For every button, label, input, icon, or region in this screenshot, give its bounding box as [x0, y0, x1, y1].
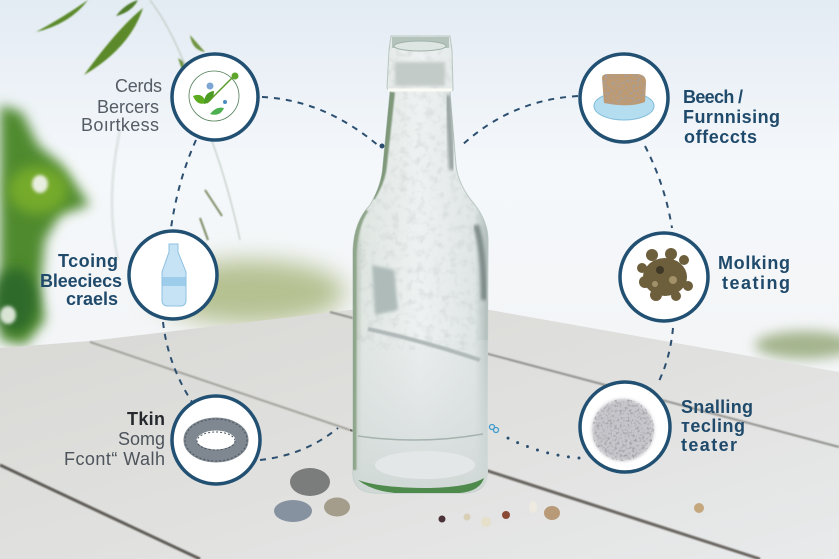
label: pellets	[718, 253, 790, 293]
label: pellets: Molking	[718, 253, 790, 273]
icon: block on dish	[594, 72, 654, 120]
node: ring	[172, 396, 260, 484]
label: herbs: Bercers	[97, 97, 159, 117]
glass bottle	[350, 30, 492, 493]
label: bottle: craels	[66, 289, 118, 309]
dashed connectors	[163, 96, 673, 460]
label: pellets: teating	[722, 273, 790, 293]
wooden table	[0, 310, 839, 559]
label: ring: Somg	[118, 429, 165, 449]
node: pellets	[620, 233, 708, 321]
label: beech: Furnnising	[683, 107, 780, 127]
label: powder: Snalling	[681, 397, 753, 417]
label: bottle	[40, 251, 122, 309]
label: ring	[64, 409, 165, 469]
label: herbs: Cerds	[115, 76, 162, 96]
pebbles and seeds	[274, 468, 704, 527]
label: herbs: Boırtkess	[81, 115, 159, 135]
label: powder	[681, 397, 753, 455]
label: herbs	[81, 76, 162, 135]
icon: leaves	[189, 71, 239, 121]
label: beech: Beech /	[683, 87, 743, 107]
label: bottle: Tcoing	[58, 251, 118, 271]
node: powder	[580, 382, 670, 472]
branch leaves	[36, 0, 240, 260]
label: ring: Tkin	[127, 409, 165, 429]
blurred foliage backdrop	[0, 105, 839, 359]
icon: powder heap	[590, 398, 656, 462]
label: beech: offeccts	[684, 127, 757, 147]
icon: pellet pile	[637, 248, 693, 301]
label: bottle: Bleeciecs	[40, 271, 122, 291]
icon: textured ring	[185, 419, 247, 461]
label: beech	[683, 87, 780, 147]
label: ring: Fcont“ Walh	[64, 449, 165, 469]
node: bottle	[129, 231, 217, 319]
node: beech block	[580, 54, 668, 142]
label: powder: тecling	[681, 416, 745, 436]
label: powder: teater	[681, 435, 737, 455]
icon: small bottle	[162, 244, 186, 306]
node: herbs	[172, 54, 258, 140]
